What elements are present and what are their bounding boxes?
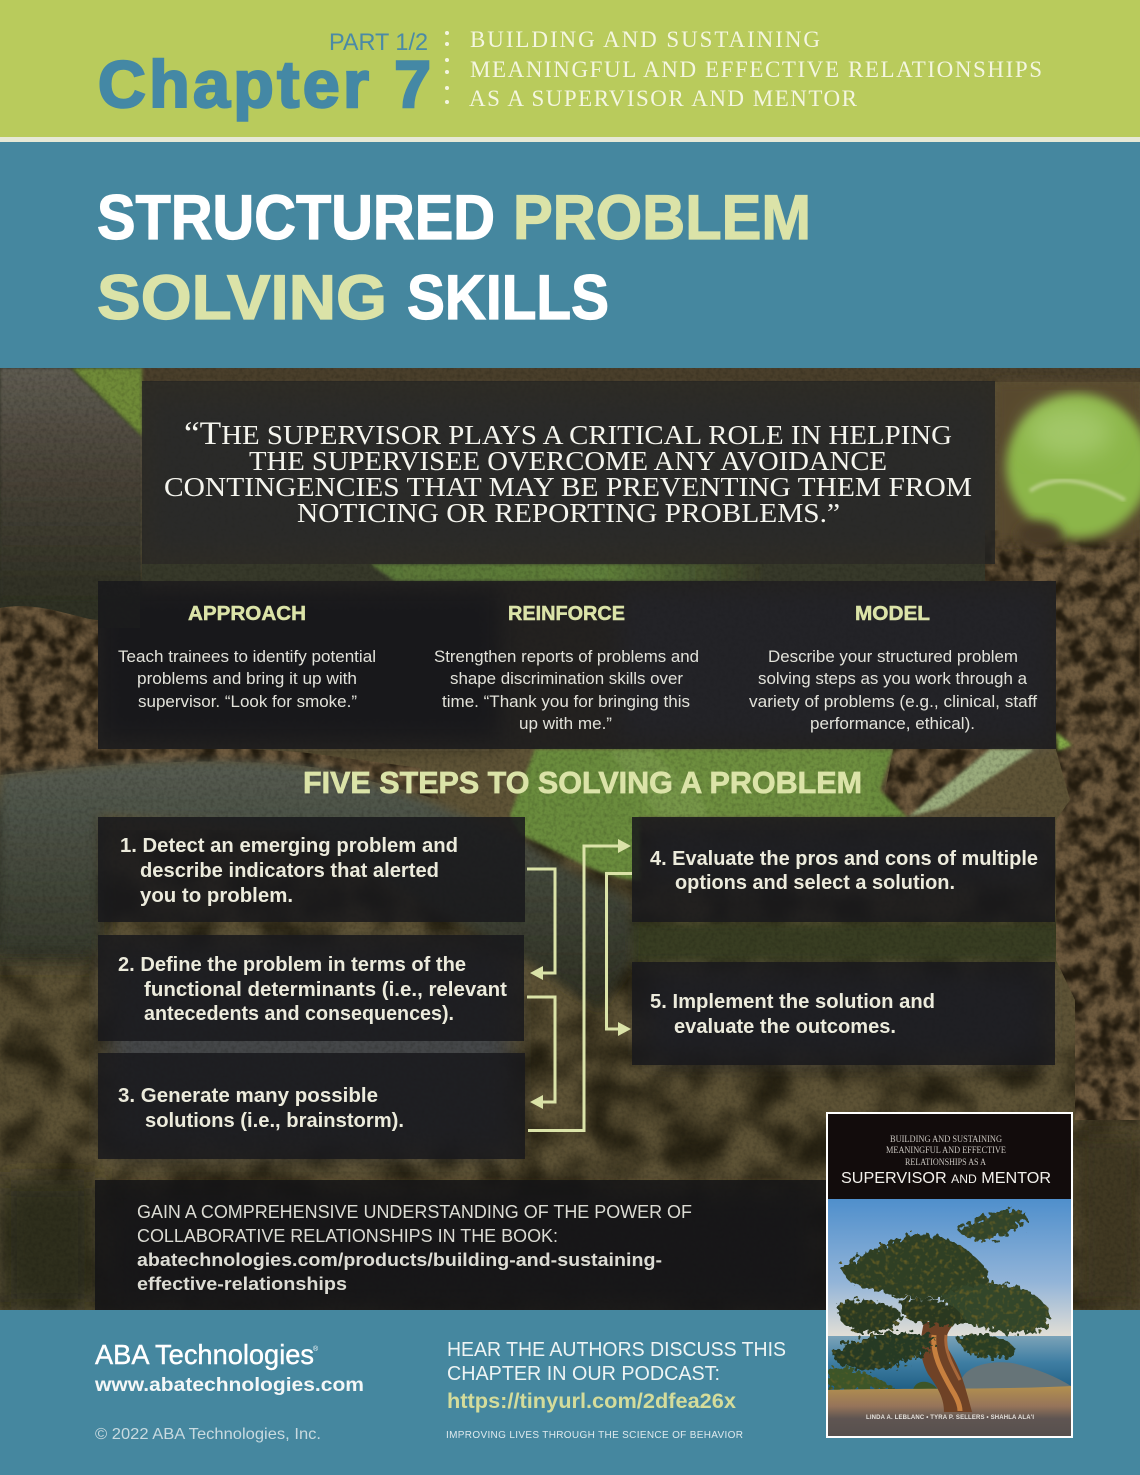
step 1	[98, 817, 525, 922]
call to action panel	[95, 1180, 830, 1310]
title band	[0, 142, 1140, 368]
soft colour regions behind panels	[0, 598, 1140, 1310]
column: model: variety of problems (e.g., clinical, staff	[749, 692, 1037, 711]
arrow: step 3 to step 4	[528, 839, 631, 1130]
book cover title: RELATIONSHIPS AS A	[905, 1157, 986, 1167]
title: STRUCTURED	[97, 183, 495, 253]
step 4: 4. Evaluate the pros and cons of multiple	[650, 848, 1038, 870]
step 2	[98, 935, 524, 1041]
green central leaf	[510, 749, 907, 880]
pale leaf stem	[908, 749, 1035, 817]
logo: ABA Technologies: ®	[313, 1345, 319, 1353]
step 1: 1. Detect an emerging problem and	[120, 835, 458, 857]
column: approach: problems and bring it up with	[137, 669, 357, 688]
quote panel	[142, 381, 995, 564]
step 5: 5. Implement the solution and	[650, 991, 935, 1013]
column: approach: Teach trainees to identify potential	[118, 647, 376, 666]
book title in header: MEANINGFUL AND EFFECTIVE RELATIONSHIPS	[470, 57, 1042, 82]
column: reinforce: time. “Thank you for bringing this	[442, 692, 690, 711]
arrow: step 4 to step 5	[606, 874, 632, 1036]
grey stone top left	[0, 368, 142, 600]
column: reinforce: shape discrimination skills over	[450, 669, 683, 688]
column: reinforce	[434, 603, 699, 733]
column: reinforce: REINFORCE	[508, 603, 625, 625]
quote text: THE SUPERVISEE OVERCOME ANY AVOIDANCE	[249, 446, 887, 476]
green leaf top left	[72, 368, 142, 436]
title	[97, 183, 811, 333]
book title in header: AS A SUPERVISOR AND MENTOR	[469, 86, 858, 111]
column: approach	[118, 603, 376, 711]
podcast callout	[447, 1339, 786, 1413]
column: approach: supervisor. “Look for smoke.”	[138, 692, 357, 711]
large grey leaf	[0, 762, 632, 1010]
step 3	[98, 1053, 525, 1159]
header band	[0, 0, 1140, 142]
panel: approach, reinforce, model	[98, 581, 1056, 749]
step 1: you to problem.	[140, 885, 293, 907]
column: reinforce: up with me.”	[519, 714, 612, 733]
call to action panel: COLLABORATIVE RELATIONSHIPS IN THE BOOK:	[137, 1226, 558, 1246]
column: approach: APPROACH	[188, 603, 306, 625]
book cover	[826, 1112, 1073, 1438]
step 1: describe indicators that alerted	[140, 860, 439, 882]
background photo: seedling in soil	[0, 368, 1140, 1310]
step 2: 2. Define the problem in terms of the	[118, 954, 466, 976]
book cover title: BUILDING AND SUSTAINING	[890, 1134, 1002, 1144]
chapter heading: Chapter 7	[98, 47, 431, 121]
sprout leaf	[995, 382, 1140, 549]
tagline: IMPROVING LIVES THROUGH THE SCIENCE OF BEHAVIOR	[446, 1430, 743, 1441]
podcast callout: https://tinyurl.com/2dfea26x	[447, 1390, 736, 1413]
step 5: evaluate the outcomes.	[674, 1016, 896, 1038]
title: SKILLS	[407, 263, 609, 333]
arrow: step 1 to step 2	[527, 869, 555, 980]
podcast callout: CHAPTER IN OUR PODCAST:	[447, 1363, 720, 1385]
copyright: © 2022 ABA Technologies, Inc.	[95, 1426, 321, 1443]
column: reinforce: Strengthen reports of problems and	[434, 647, 699, 666]
green band beneath quote	[142, 564, 995, 581]
quote text: NOTICING OR REPORTING PROBLEMS.”	[297, 498, 840, 528]
title: SOLVING	[97, 263, 387, 333]
arrow: step 2 to step 3	[527, 997, 555, 1109]
quote text: CONTINGENCIES THAT MAY BE PREVENTING THEM FROM	[164, 472, 972, 502]
part label: PART 1/2	[329, 29, 428, 56]
call to action panel: effective-relationships	[137, 1274, 347, 1294]
step 3: solutions (i.e., brainstorm).	[145, 1110, 404, 1132]
website: www.abatechnologies.com	[94, 1375, 364, 1396]
title: PROBLEM	[513, 183, 811, 253]
book title in header	[469, 27, 1042, 111]
podcast callout: HEAR THE AUTHORS DISCUSS THIS	[447, 1339, 786, 1361]
column: model: Describe your structured problem	[768, 647, 1018, 666]
quote text: “THE SUPERVISOR PLAYS A CRITICAL ROLE IN HELPING	[184, 416, 952, 452]
step 3: 3. Generate many possible	[118, 1085, 378, 1107]
book cover title	[841, 1134, 1051, 1187]
column: model: MODEL	[855, 603, 930, 625]
cover authors: LINDA A. LEBLANC • TYRA P. SELLERS • SHAHLA ALA'I	[866, 1415, 1034, 1421]
step 4	[632, 817, 1055, 922]
quote text	[164, 416, 972, 528]
call to action panel: GAIN A COMPREHENSIVE UNDERSTANDING OF THE POWER OF	[137, 1202, 692, 1222]
soil texture	[0, 530, 1140, 1130]
logo: ABA Technologies: ABA Technologies	[95, 1339, 314, 1370]
step 2: antecedents and consequences).	[144, 1003, 454, 1025]
step 2: functional determinants (i.e., relevant	[144, 979, 507, 1001]
step 4: options and select a solution.	[675, 872, 955, 894]
column: model: performance, ethical).	[810, 714, 975, 733]
book cover title: SUPERVISOR AND MENTOR	[841, 1170, 1051, 1187]
call to action panel: abatechnologies.com/products/building-and-sustaining-	[137, 1250, 662, 1270]
cover photo: windswept tree	[828, 1199, 1071, 1436]
column: model	[749, 603, 1037, 733]
book cover title: MEANINGFUL AND EFFECTIVE	[886, 1145, 1006, 1155]
dotted divider	[445, 31, 449, 104]
step 5	[632, 962, 1055, 1065]
book title in header: BUILDING AND SUSTAINING	[470, 27, 820, 52]
column: model: solving steps as you work through a	[758, 669, 1028, 688]
footer band	[0, 1310, 1140, 1475]
heading: five steps: FIVE STEPS TO SOLVING A PROBLEM	[303, 765, 862, 800]
